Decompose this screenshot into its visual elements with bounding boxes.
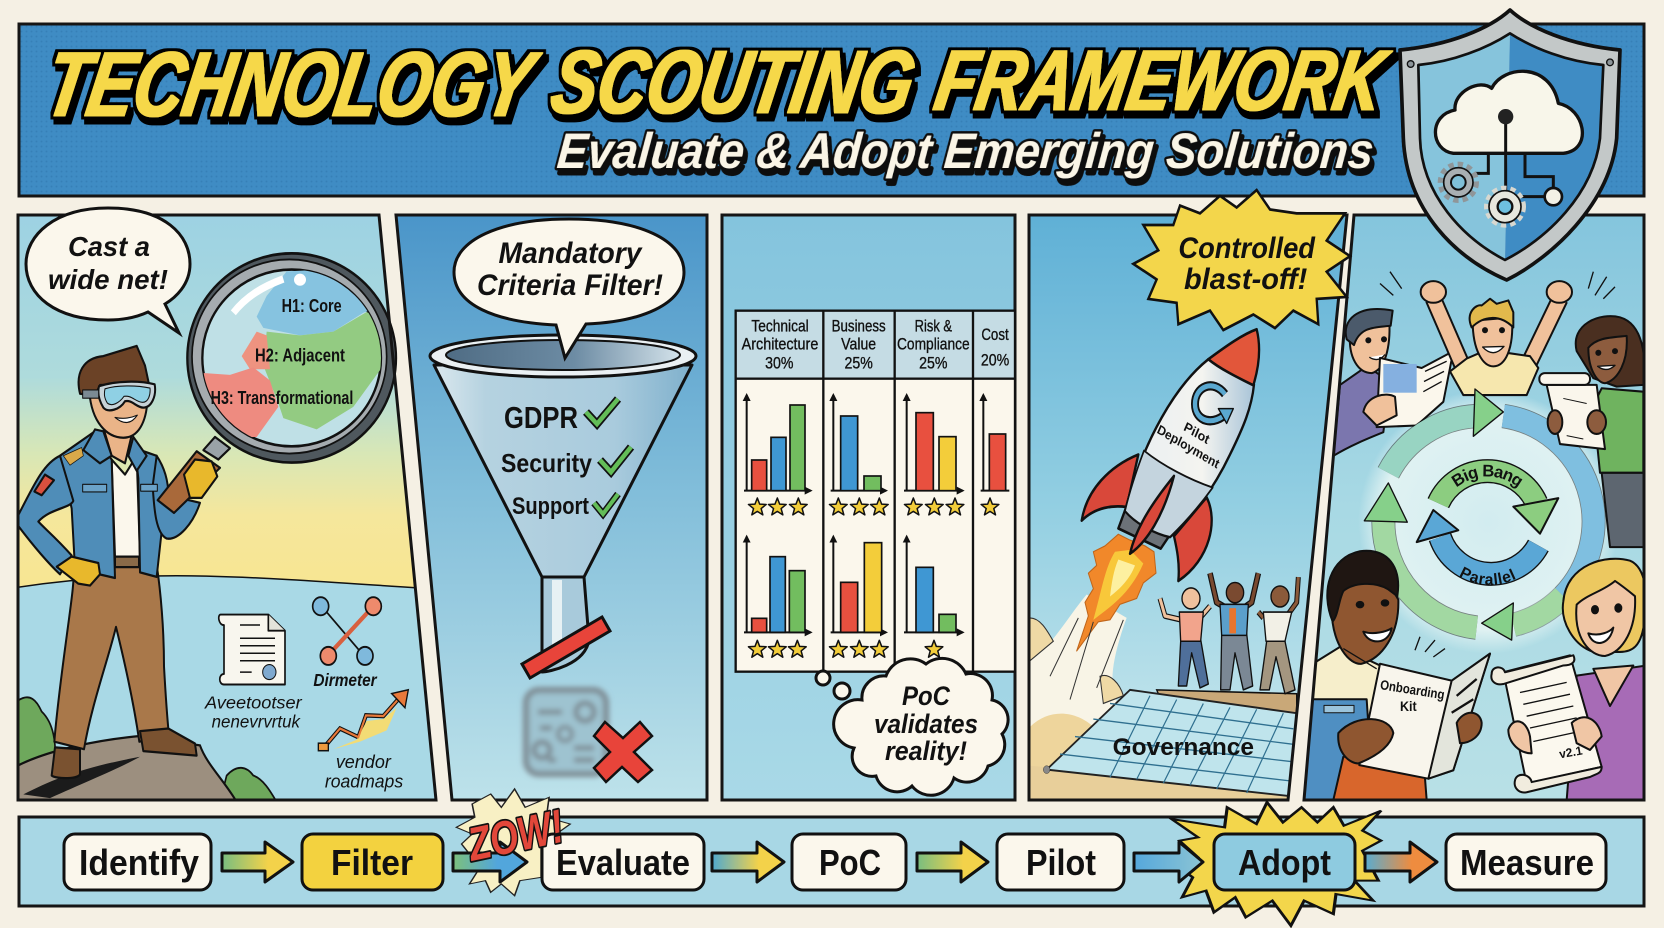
criteria list: GDPR — [504, 400, 578, 435]
funnel — [430, 335, 696, 672]
horizon labels: H1: Core — [282, 295, 342, 316]
column headings: 20% — [981, 352, 1009, 370]
exhaust plume — [1030, 595, 1127, 800]
neck — [103, 428, 132, 463]
panel 1 illustration — [15, 346, 440, 817]
horizon labels: H3: Transformational — [211, 387, 353, 408]
jacket collar — [83, 429, 147, 471]
centre fin — [1130, 476, 1174, 554]
thought bubble: poc validates reality: reality! — [885, 736, 967, 766]
criteria list: Support — [512, 493, 589, 520]
panel 2 background — [396, 215, 707, 800]
icon: contract document — [219, 615, 285, 684]
title: TECHNOLOGY — [39, 33, 546, 136]
panel 4 frame — [1029, 215, 1347, 800]
icon: crossed connectors — [313, 597, 381, 665]
starburst: controlled blast-off: Controlled — [1178, 231, 1316, 265]
person: cheering centre — [1421, 281, 1572, 395]
flame — [1077, 534, 1156, 651]
hip glove — [57, 557, 100, 586]
criteria list — [501, 399, 631, 520]
funnel cone — [434, 365, 692, 577]
column headings: Technical — [751, 318, 809, 336]
document caption: Aveetootser — [204, 694, 302, 713]
step: filter — [302, 834, 443, 890]
cloud — [1435, 71, 1582, 153]
column headings: Compliance — [897, 335, 970, 353]
gear centre — [1486, 188, 1524, 225]
starburst: controlled blast-off — [1133, 190, 1350, 330]
grip glove — [184, 460, 217, 498]
node right — [1545, 188, 1562, 205]
right boot — [140, 729, 197, 756]
gear left — [1440, 164, 1476, 200]
icon: red cross — [594, 722, 652, 782]
arrow: identify to filter — [222, 842, 293, 882]
axes — [744, 395, 1009, 632]
speech bubble: cast a wide net: Cast a — [68, 231, 150, 262]
roadmap caption — [325, 751, 403, 792]
panel 4 background — [1029, 215, 1347, 800]
rollout cycle — [1364, 388, 1606, 641]
parallel arc arrow: Parallel — [1460, 566, 1516, 584]
connector caption: Dirmeter — [313, 671, 378, 690]
panel 5 background — [1304, 215, 1644, 800]
H3 region — [200, 367, 278, 437]
team member one — [1160, 588, 1210, 688]
scorecard table — [736, 311, 1015, 672]
column headings — [742, 318, 1009, 372]
outer arrowheads — [1364, 389, 1513, 640]
roadmap caption: vendor — [336, 751, 392, 772]
speech bubble: mandatory criteria: Mandatory — [498, 237, 643, 270]
zow starburst — [456, 789, 570, 896]
column headings: 30% — [765, 354, 793, 372]
column headings: Business — [832, 318, 886, 336]
panel 3 background — [722, 215, 1015, 800]
shoulder patch — [34, 475, 54, 495]
sea horizon — [17, 576, 440, 817]
step: identify — [64, 834, 211, 890]
shirt — [112, 456, 140, 557]
right arm — [153, 456, 200, 539]
horizon labels — [211, 295, 353, 408]
panel 1 frame — [18, 215, 436, 800]
dust cloud — [1030, 714, 1093, 800]
column headings: Value — [841, 335, 876, 353]
step: evaluate — [542, 834, 704, 890]
left bush — [18, 697, 55, 768]
speed lines — [1050, 618, 1123, 700]
smile — [115, 415, 137, 423]
rock — [17, 736, 237, 802]
table header row — [736, 311, 1015, 379]
column headings: 25% — [844, 354, 873, 372]
shield rim — [1400, 10, 1620, 280]
magnifier rim — [187, 253, 396, 463]
explorer — [15, 346, 230, 778]
step: measure: Measure — [1460, 842, 1594, 883]
left arm — [15, 456, 73, 574]
column headings: Architecture — [742, 335, 818, 353]
face — [89, 398, 148, 439]
rivets — [1407, 59, 1613, 67]
rocket — [1082, 329, 1259, 581]
speech bubble: cast a wide net: wide net! — [48, 264, 168, 295]
rock shadow — [23, 757, 140, 798]
criteria list: Security — [501, 448, 592, 478]
onboarding kit book: Kit — [1400, 699, 1417, 714]
document caption — [204, 694, 302, 732]
icon: cloud shield — [1400, 10, 1620, 280]
magnifier handle — [158, 451, 220, 513]
pockets — [83, 484, 107, 492]
roadmap caption: roadmaps — [325, 771, 403, 792]
speech bubble: mandatory criteria — [454, 219, 684, 358]
lens and doodles — [187, 253, 408, 792]
H2 red region — [242, 332, 270, 369]
icon: rejected blurred tool — [526, 690, 606, 774]
rocket label: Deployment — [1155, 422, 1222, 472]
rocket body — [1125, 359, 1254, 537]
team member two — [1210, 573, 1258, 690]
person: reader top left — [1333, 309, 1453, 456]
person: documentation lead — [1491, 559, 1647, 800]
adopt starburst — [1172, 802, 1381, 926]
lower body shade — [1125, 451, 1213, 537]
person: reader top right — [1576, 316, 1645, 547]
process strip — [19, 789, 1644, 926]
lens glass — [202, 270, 381, 446]
column headings: Cost — [981, 326, 1009, 344]
funnel rim — [430, 335, 696, 377]
arrow: poc to pilot — [917, 842, 988, 882]
step: adopt — [1214, 834, 1355, 890]
column dividers — [823, 311, 973, 672]
document caption: nenevrvrtuk — [212, 713, 301, 732]
step: evaluate: Evaluate — [556, 842, 690, 883]
circuit stem — [1501, 117, 1510, 153]
strip background — [19, 817, 1644, 906]
panel 3: evaluation scorecards — [722, 215, 1015, 800]
panel 1: identify explorer — [15, 215, 440, 817]
panel 4 illustration — [1030, 329, 1298, 800]
big bang arc arrow: Big Bang — [1451, 464, 1522, 488]
left fin — [1082, 455, 1138, 521]
scroll held top right — [1539, 373, 1606, 449]
thought bubble: poc validates reality — [816, 658, 1008, 795]
ground — [1030, 766, 1297, 800]
title: FRAMEWORK — [929, 34, 1396, 129]
shield left face — [1418, 33, 1510, 260]
panel 1 background — [18, 215, 436, 800]
horizon labels: H2: Adjacent — [255, 345, 345, 366]
header banner — [19, 24, 1644, 196]
arrow: evaluate to poc — [712, 842, 784, 882]
jacket right — [138, 450, 162, 578]
goggles — [98, 382, 155, 410]
step: identify: Identify — [79, 842, 199, 883]
belt — [115, 557, 139, 567]
team member three — [1258, 577, 1298, 694]
cycle glow — [1358, 390, 1618, 654]
speech bubble: cast a wide net — [26, 208, 190, 333]
hair — [79, 346, 149, 396]
nozzle — [1118, 506, 1172, 549]
table body — [736, 311, 1015, 672]
H2 green region — [263, 312, 383, 429]
title: SCOUTING — [545, 33, 922, 133]
icon: roadmap trend arrow — [318, 690, 408, 751]
jacket left — [60, 432, 115, 578]
funnel spout — [542, 577, 589, 672]
subtitle: Evaluate & Adopt Emerging Solutions — [555, 123, 1376, 179]
goggle strap — [83, 390, 99, 398]
speech bubble: mandatory criteria: Criteria Filter! — [477, 269, 663, 302]
arrow: filter to evaluate — [453, 842, 527, 882]
title — [39, 33, 1396, 136]
parallel arc arrow — [1416, 508, 1549, 586]
zow label: ZOW! — [462, 799, 568, 871]
bars — [752, 405, 1006, 632]
cloud node — [1498, 109, 1513, 124]
epaulet — [63, 447, 83, 465]
cheering team — [1160, 573, 1298, 694]
horizons map — [200, 268, 383, 437]
step: pilot — [997, 834, 1124, 890]
H1 region — [256, 270, 368, 336]
thought bubble: poc validates reality: validates — [874, 709, 978, 739]
thought bubble: poc validates reality: PoC — [902, 681, 950, 711]
panel 4: pilot rocket — [1029, 215, 1347, 800]
governance safety net — [1043, 690, 1297, 797]
panel 5: adopt team and rollout cycle — [1302, 214, 1646, 802]
big bang arc arrow — [1428, 459, 1560, 535]
step: poc: PoC — [819, 842, 881, 883]
handle collar — [203, 437, 230, 460]
column headings: 25% — [919, 354, 947, 372]
right bush — [224, 766, 276, 798]
person: documentation lead: v2.1 — [1558, 743, 1584, 761]
person: onboarding lead — [1300, 551, 1427, 800]
net label: Governance — [1113, 734, 1254, 761]
step: poc — [792, 834, 906, 890]
left boot — [52, 747, 80, 778]
highlight — [233, 279, 283, 313]
panel 5 frame — [1304, 215, 1644, 800]
nose cone — [1208, 329, 1259, 385]
excitement marks — [1380, 272, 1615, 657]
pilot logo — [1195, 386, 1228, 421]
circuit lines — [1475, 117, 1553, 197]
shield inner line — [1418, 33, 1603, 260]
icon: red block bar — [522, 617, 610, 678]
right fin — [1174, 497, 1212, 581]
starburst: controlled blast-off: blast-off! — [1184, 262, 1307, 296]
step: pilot: Pilot — [1026, 842, 1096, 883]
panel 2: filter funnel — [396, 215, 707, 800]
arrow: pilot to adopt — [1134, 842, 1203, 882]
star ratings — [748, 498, 999, 657]
panel 5 illustration — [1306, 271, 1642, 798]
outer ring — [1383, 416, 1594, 628]
step: filter: Filter — [331, 842, 413, 883]
rocket label: Pilot — [1182, 419, 1212, 447]
step: adopt: Adopt — [1238, 842, 1331, 883]
step: measure — [1446, 834, 1606, 890]
trousers — [54, 565, 169, 749]
shield right face — [1505, 33, 1603, 260]
cheering team platform — [1157, 690, 1297, 713]
column headings: Risk & — [915, 318, 952, 336]
onboarding kit book — [1338, 654, 1490, 779]
arrow: adopt to measure — [1365, 842, 1437, 882]
onboarding kit book: Onboarding — [1379, 677, 1446, 702]
